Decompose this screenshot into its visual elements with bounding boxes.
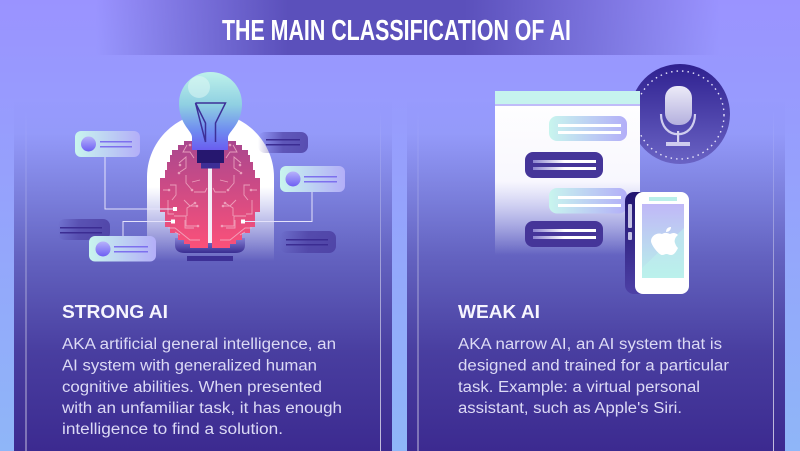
illustration: brain and lightbulb	[58, 72, 345, 262]
heading: weak AI: WEAK AI	[458, 301, 540, 322]
connector lines	[105, 156, 312, 237]
panel: weak AI	[407, 64, 785, 451]
text: strong AI description	[61, 336, 342, 438]
chat window	[495, 91, 640, 255]
microphone badge	[630, 64, 730, 164]
text: weak AI description: designed and trained for a particular	[458, 358, 729, 374]
connector nodes	[171, 207, 245, 224]
text: weak AI description: task. Example: a virtual personal	[458, 379, 700, 396]
brain centre line	[208, 168, 212, 243]
title banner	[0, 0, 800, 55]
card: upper left	[75, 131, 140, 157]
chat bubble 2	[525, 152, 603, 178]
panel: strong AI	[14, 72, 392, 451]
dark card: upper right	[258, 132, 308, 153]
text: weak AI description	[458, 336, 729, 417]
white arch	[147, 113, 274, 261]
text: strong AI description: with an unfamiliar task, it has enough	[61, 400, 342, 417]
text: strong AI description: AKA artificial general intelligence, an	[62, 336, 336, 353]
dark card: lower right	[280, 231, 336, 253]
chat bubble 4	[525, 221, 603, 247]
chat bubble 3	[549, 188, 627, 214]
text: strong AI description: AI system with generalized human	[62, 358, 317, 374]
heading: strong AI: STRONG AI	[62, 301, 168, 322]
text: strong AI description: cognitive abilities. When presented	[62, 379, 322, 396]
brain base	[175, 238, 245, 261]
text: weak AI description: AKA narrow AI, an AI system that is	[458, 336, 722, 353]
lightbulb	[179, 72, 242, 168]
brain circuits: left	[163, 144, 207, 240]
card: right	[280, 166, 345, 192]
text: strong AI description: intelligence to find a solution.	[62, 421, 283, 438]
chat bubble 1	[549, 116, 627, 141]
dark card: lower left	[58, 219, 110, 240]
text: weak AI description: assistant, such as Apple's Siri.	[458, 400, 682, 417]
icon: apple logo	[651, 227, 678, 255]
title: THE MAIN CLASSIFICATION OF AI	[222, 15, 571, 47]
brain circuits: right	[213, 144, 257, 240]
card: lower left	[89, 236, 156, 262]
illustration: voice assistant	[495, 64, 730, 294]
smartphone	[625, 192, 689, 294]
brain	[160, 141, 260, 248]
